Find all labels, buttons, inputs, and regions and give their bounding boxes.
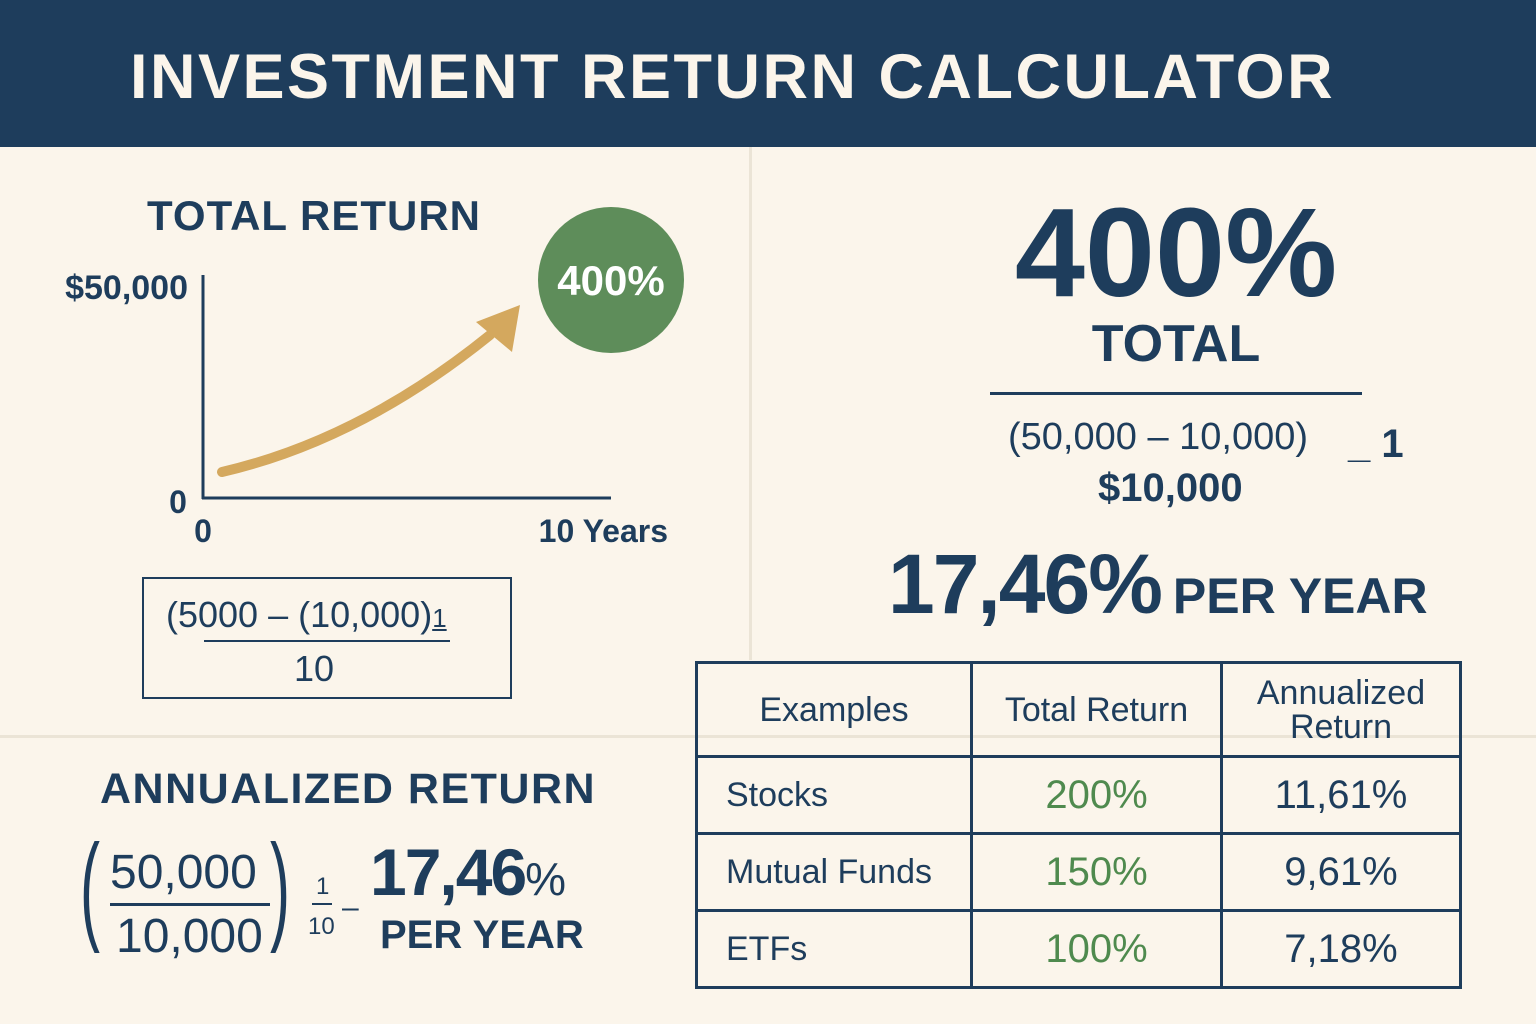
table: examples: 150% bbox=[1045, 850, 1148, 894]
formula: annualized: PER YEAR bbox=[380, 913, 584, 957]
table: examples: 100% bbox=[1045, 927, 1148, 971]
chart: growth bbox=[65, 207, 684, 549]
table: examples: Return bbox=[1290, 708, 1392, 746]
big stat: 400% total: TOTAL bbox=[1092, 315, 1260, 373]
chart: growth: 10 Years bbox=[539, 513, 668, 549]
formula: annualized bbox=[80, 820, 584, 963]
table: examples: 9,61% bbox=[1284, 850, 1398, 894]
formula: total return: $10,000 bbox=[1098, 466, 1243, 510]
table: examples: 7,18% bbox=[1284, 927, 1398, 971]
table: examples: Total Return bbox=[1005, 690, 1188, 728]
table: examples bbox=[695, 661, 1462, 989]
formula: annualized: – bbox=[342, 891, 359, 924]
formula: annualized: 50,000 bbox=[110, 846, 257, 899]
formula: total return: _ 1 bbox=[1348, 422, 1404, 466]
formula: annualized: 17,46% bbox=[370, 835, 564, 909]
chart: growth: 0 bbox=[194, 513, 212, 549]
formula: annualized: ) bbox=[270, 820, 290, 954]
heading: annualized return: ANNUALIZED RETURN bbox=[100, 765, 596, 813]
table: examples: Stocks bbox=[726, 776, 828, 814]
chart: growth: 400% bbox=[557, 257, 665, 304]
formula box bbox=[142, 577, 512, 699]
formula: total return bbox=[1008, 416, 1404, 510]
header bar bbox=[0, 0, 1536, 147]
formula box: (5000 – (10,000)1 bbox=[166, 594, 447, 635]
table: examples: Mutual Funds bbox=[726, 853, 932, 891]
table: examples: 11,61% bbox=[1275, 773, 1407, 817]
table: examples: 200% bbox=[1045, 773, 1148, 817]
formula: annualized: 10 bbox=[308, 913, 335, 940]
big stat: 400% total: 400% bbox=[1015, 182, 1337, 323]
table: examples: Annualized bbox=[1257, 674, 1425, 712]
table: examples: ETFs bbox=[726, 930, 807, 968]
heading: total return: TOTAL RETURN bbox=[147, 192, 481, 239]
chart: growth: 0 bbox=[169, 484, 187, 520]
table: examples: Examples bbox=[759, 690, 909, 728]
formula box: 10 bbox=[294, 648, 334, 689]
title: INVESTMENT RETURN CALCULATOR bbox=[130, 42, 1335, 112]
big stat: 400% total bbox=[990, 182, 1362, 395]
chart: growth: $50,000 bbox=[65, 269, 188, 307]
formula: annualized: ( bbox=[80, 820, 100, 954]
formula: total return: (50,000 – 10,000) bbox=[1008, 416, 1308, 458]
annualized stat: 17,46%PER YEAR bbox=[888, 537, 1428, 631]
formula: annualized: 10,000 bbox=[116, 910, 263, 963]
formula: annualized: 1 bbox=[316, 873, 329, 900]
